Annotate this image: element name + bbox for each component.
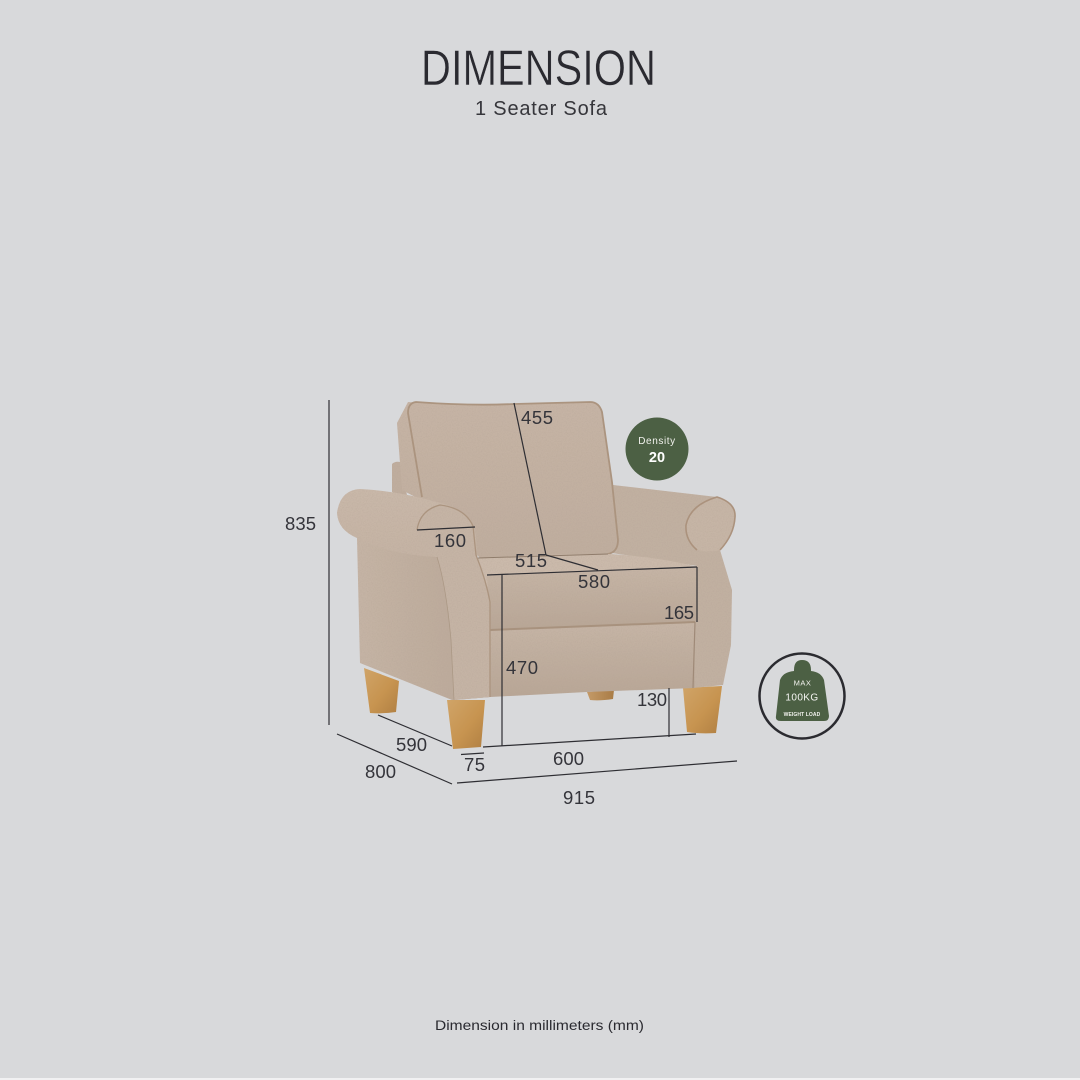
label 470: 470 [506, 657, 538, 678]
density badge: 20 [649, 450, 665, 466]
label 590: 590 [396, 734, 427, 755]
line: 800 depth [337, 734, 452, 784]
back cushion [397, 402, 618, 558]
sofa legs [364, 668, 722, 749]
dimension labels [285, 407, 694, 808]
seat front face [487, 566, 697, 630]
icon: kettlebell weight [776, 660, 829, 721]
line: 915 width [457, 761, 737, 783]
line: 160 arm width [417, 527, 475, 530]
label 835: 835 [285, 513, 316, 534]
line: 165 cushion height [696, 567, 698, 622]
label 75: 75 [464, 754, 485, 775]
line: 470 seat height [501, 575, 503, 746]
footnote: Dimension in millimeters (mm) [435, 1018, 644, 1033]
seat cushion [478, 554, 697, 630]
label 160: 160 [434, 530, 466, 551]
arm scroll face [417, 505, 490, 700]
density badge [626, 418, 688, 480]
subtitle: 1 Seater Sofa [475, 98, 608, 120]
label 800: 800 [365, 761, 396, 782]
max weight load badge: MAX [794, 678, 811, 688]
title: DIMENSION [421, 40, 656, 96]
line: 835 height [328, 400, 330, 725]
left arm roll [337, 489, 490, 700]
back frame [392, 462, 408, 500]
line: 130 leg height [668, 688, 670, 737]
line: 590 depth [378, 715, 452, 746]
lower base front [490, 622, 695, 697]
line: 455 back height [514, 403, 546, 555]
max weight load badge: 100KG [785, 692, 819, 704]
right arm [612, 485, 735, 688]
line: 75 leg [461, 753, 484, 754]
dimension lines [329, 400, 737, 784]
label 515: 515 [515, 550, 547, 571]
label 130: 130 [637, 689, 667, 710]
density badge: Density [638, 436, 676, 447]
label 165: 165 [664, 602, 694, 623]
line: 515 seat depth [546, 555, 598, 570]
line: 600 width [483, 734, 696, 747]
max weight load badge: WEIGHT LOAD [784, 712, 821, 718]
label 455: 455 [521, 407, 553, 428]
left arm body [357, 538, 490, 700]
max weight load badge [760, 654, 844, 738]
label 580: 580 [578, 571, 610, 592]
sofa illustration [337, 402, 735, 749]
label 600: 600 [553, 748, 584, 769]
label 915: 915 [563, 787, 595, 808]
line: 580 seat width [487, 567, 697, 575]
right arm scroll [686, 497, 735, 552]
